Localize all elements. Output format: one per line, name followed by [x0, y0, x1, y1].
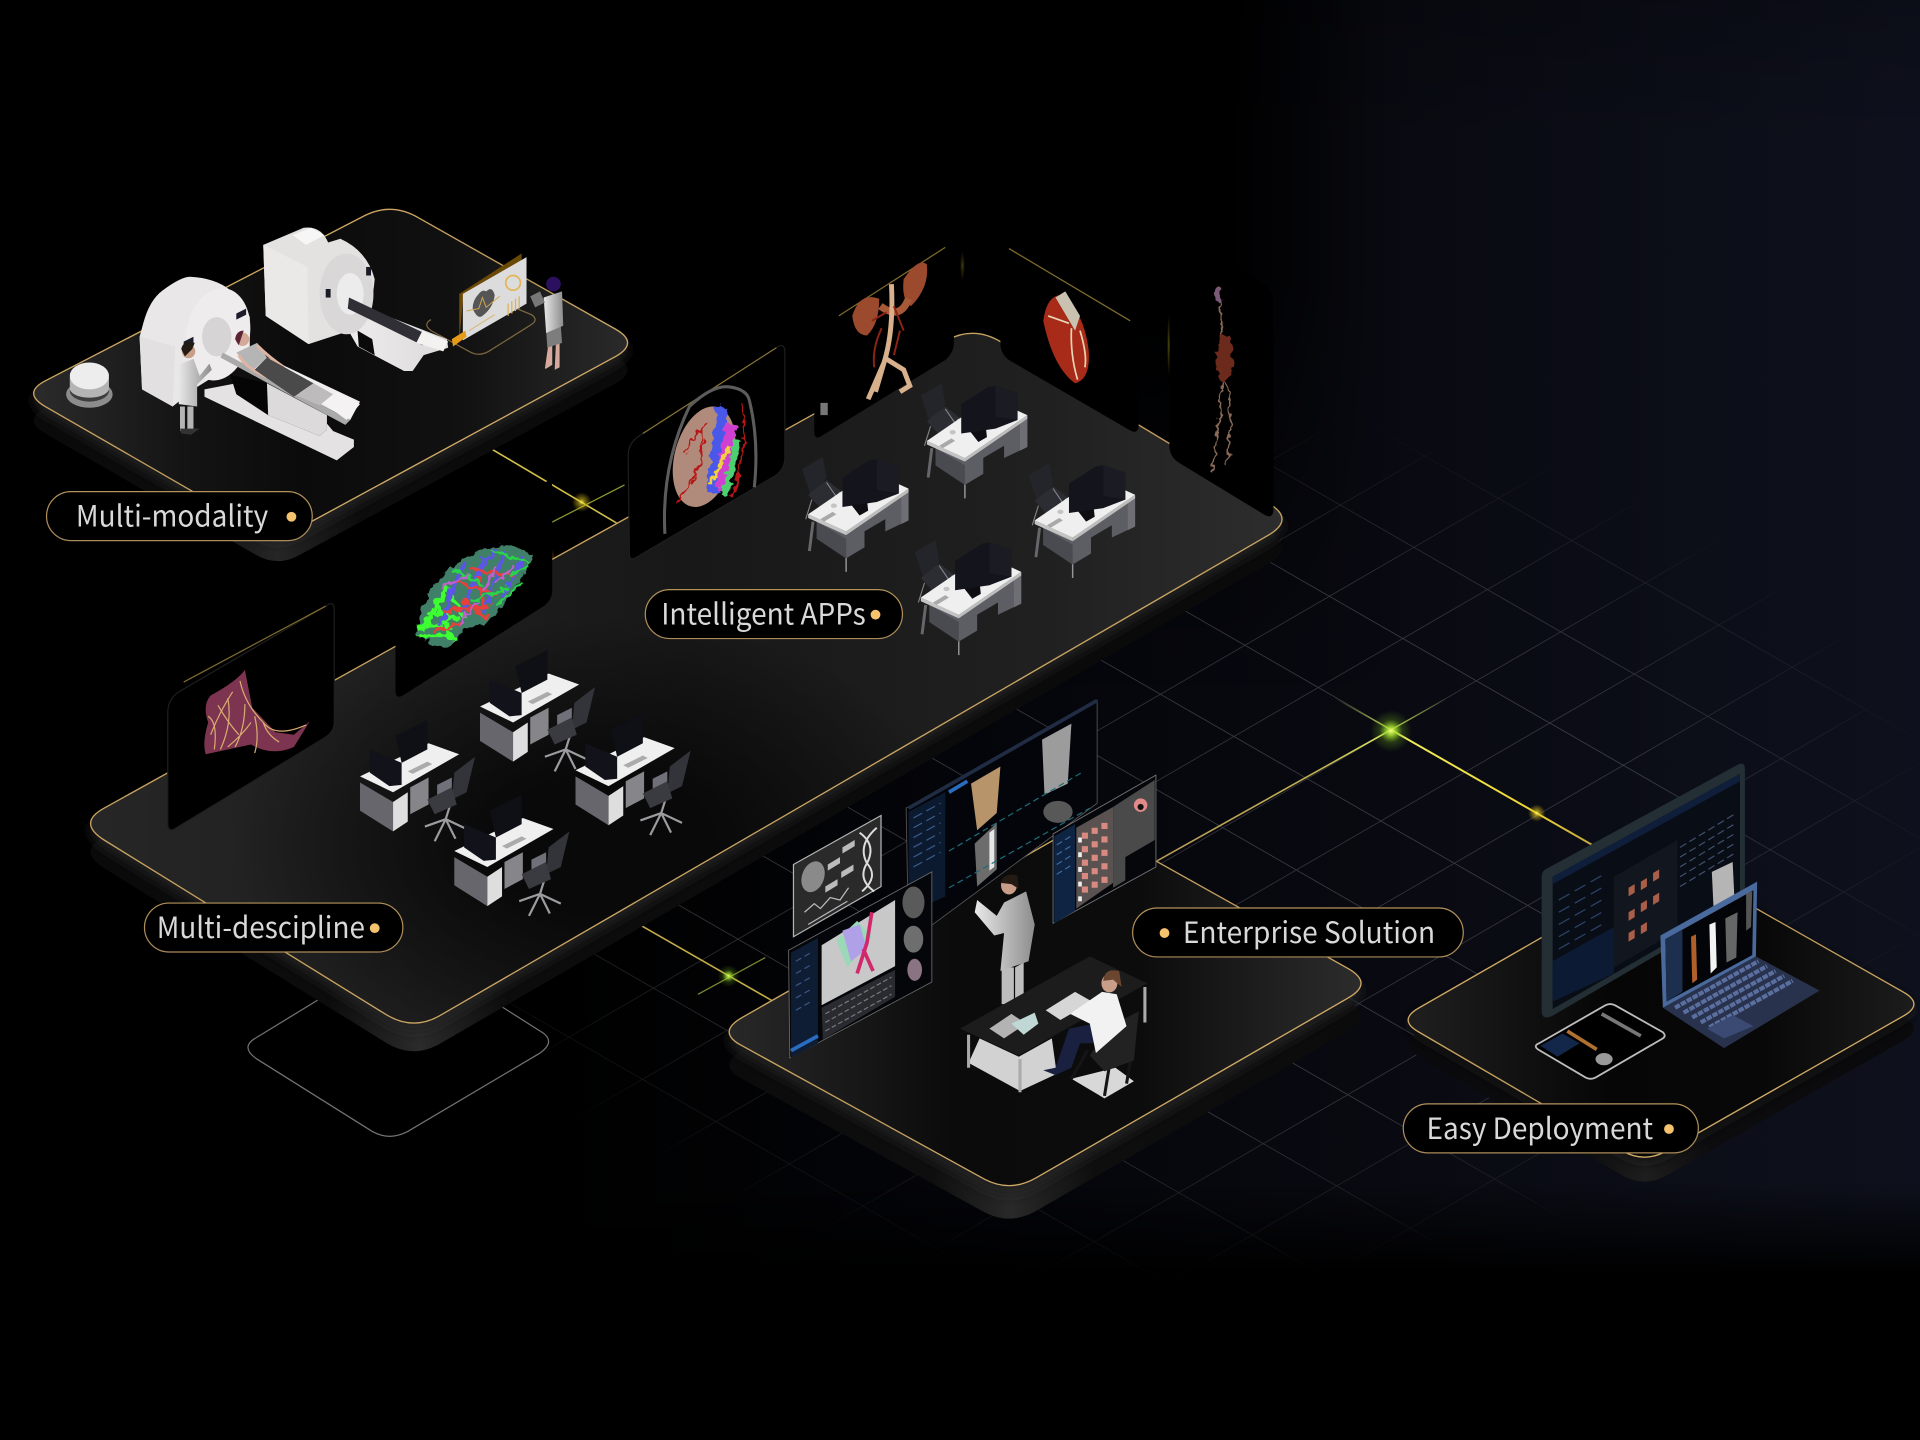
- icon: round console: [66, 362, 113, 408]
- monitor: [1542, 763, 1745, 1017]
- doctor with patient: [179, 342, 212, 435]
- tablet: [1536, 1004, 1665, 1079]
- workstations: lower group: [360, 650, 691, 916]
- screen: DNA diagram: [793, 816, 881, 937]
- label: Intelligent APPs: Intelligent APPs: [661, 591, 866, 633]
- holographic display: [452, 253, 527, 347]
- CT scanner with patient: [140, 277, 360, 460]
- floor outline rhombus: [248, 951, 549, 1136]
- panel: full body angiogram: [1169, 232, 1273, 516]
- panel: abdominal vessels: [814, 246, 954, 438]
- screen: spine viewer: [906, 700, 1097, 940]
- panel: brain with tracts: [628, 346, 785, 559]
- label: Multi-modality: [47, 492, 312, 541]
- panel: fibre tract brain: [396, 481, 552, 697]
- platform: multi-modality: [34, 209, 628, 561]
- background: [890, 0, 1920, 1247]
- screen: perfusion grid: [1053, 775, 1156, 923]
- patient: [235, 331, 313, 397]
- isometric floor grid: [510, 438, 1904, 1252]
- platform: easy deployment: [1408, 763, 1914, 1182]
- panel: foot vessels: [168, 604, 334, 830]
- floor outline under display: [427, 298, 535, 354]
- label: Easy Deployment: [1403, 1104, 1698, 1153]
- label: Easy Deployment: Easy Deployment: [1427, 1106, 1653, 1148]
- screen: vessel segmentation: [789, 872, 932, 1058]
- standing doctor: [975, 875, 1035, 1004]
- platform: central workspace: [91, 232, 1282, 1051]
- label: Multi-descipline: Multi-descipline: [157, 905, 365, 947]
- laptop: [1660, 882, 1820, 1048]
- panel: heart: [1000, 247, 1139, 432]
- label: Multi-modality: Multi-modality: [76, 494, 268, 536]
- woman with tablet: [530, 277, 563, 370]
- label: Enterprise Solution: Enterprise Solution: [1183, 910, 1435, 952]
- doctor at desk: [960, 956, 1147, 1098]
- platform: enterprise solution: [729, 700, 1361, 1219]
- workstations: upper group: [802, 383, 1135, 655]
- MRI scanner: [263, 227, 448, 371]
- connector lines: [492, 251, 1594, 1002]
- label: Enterprise Solution: [1133, 908, 1463, 957]
